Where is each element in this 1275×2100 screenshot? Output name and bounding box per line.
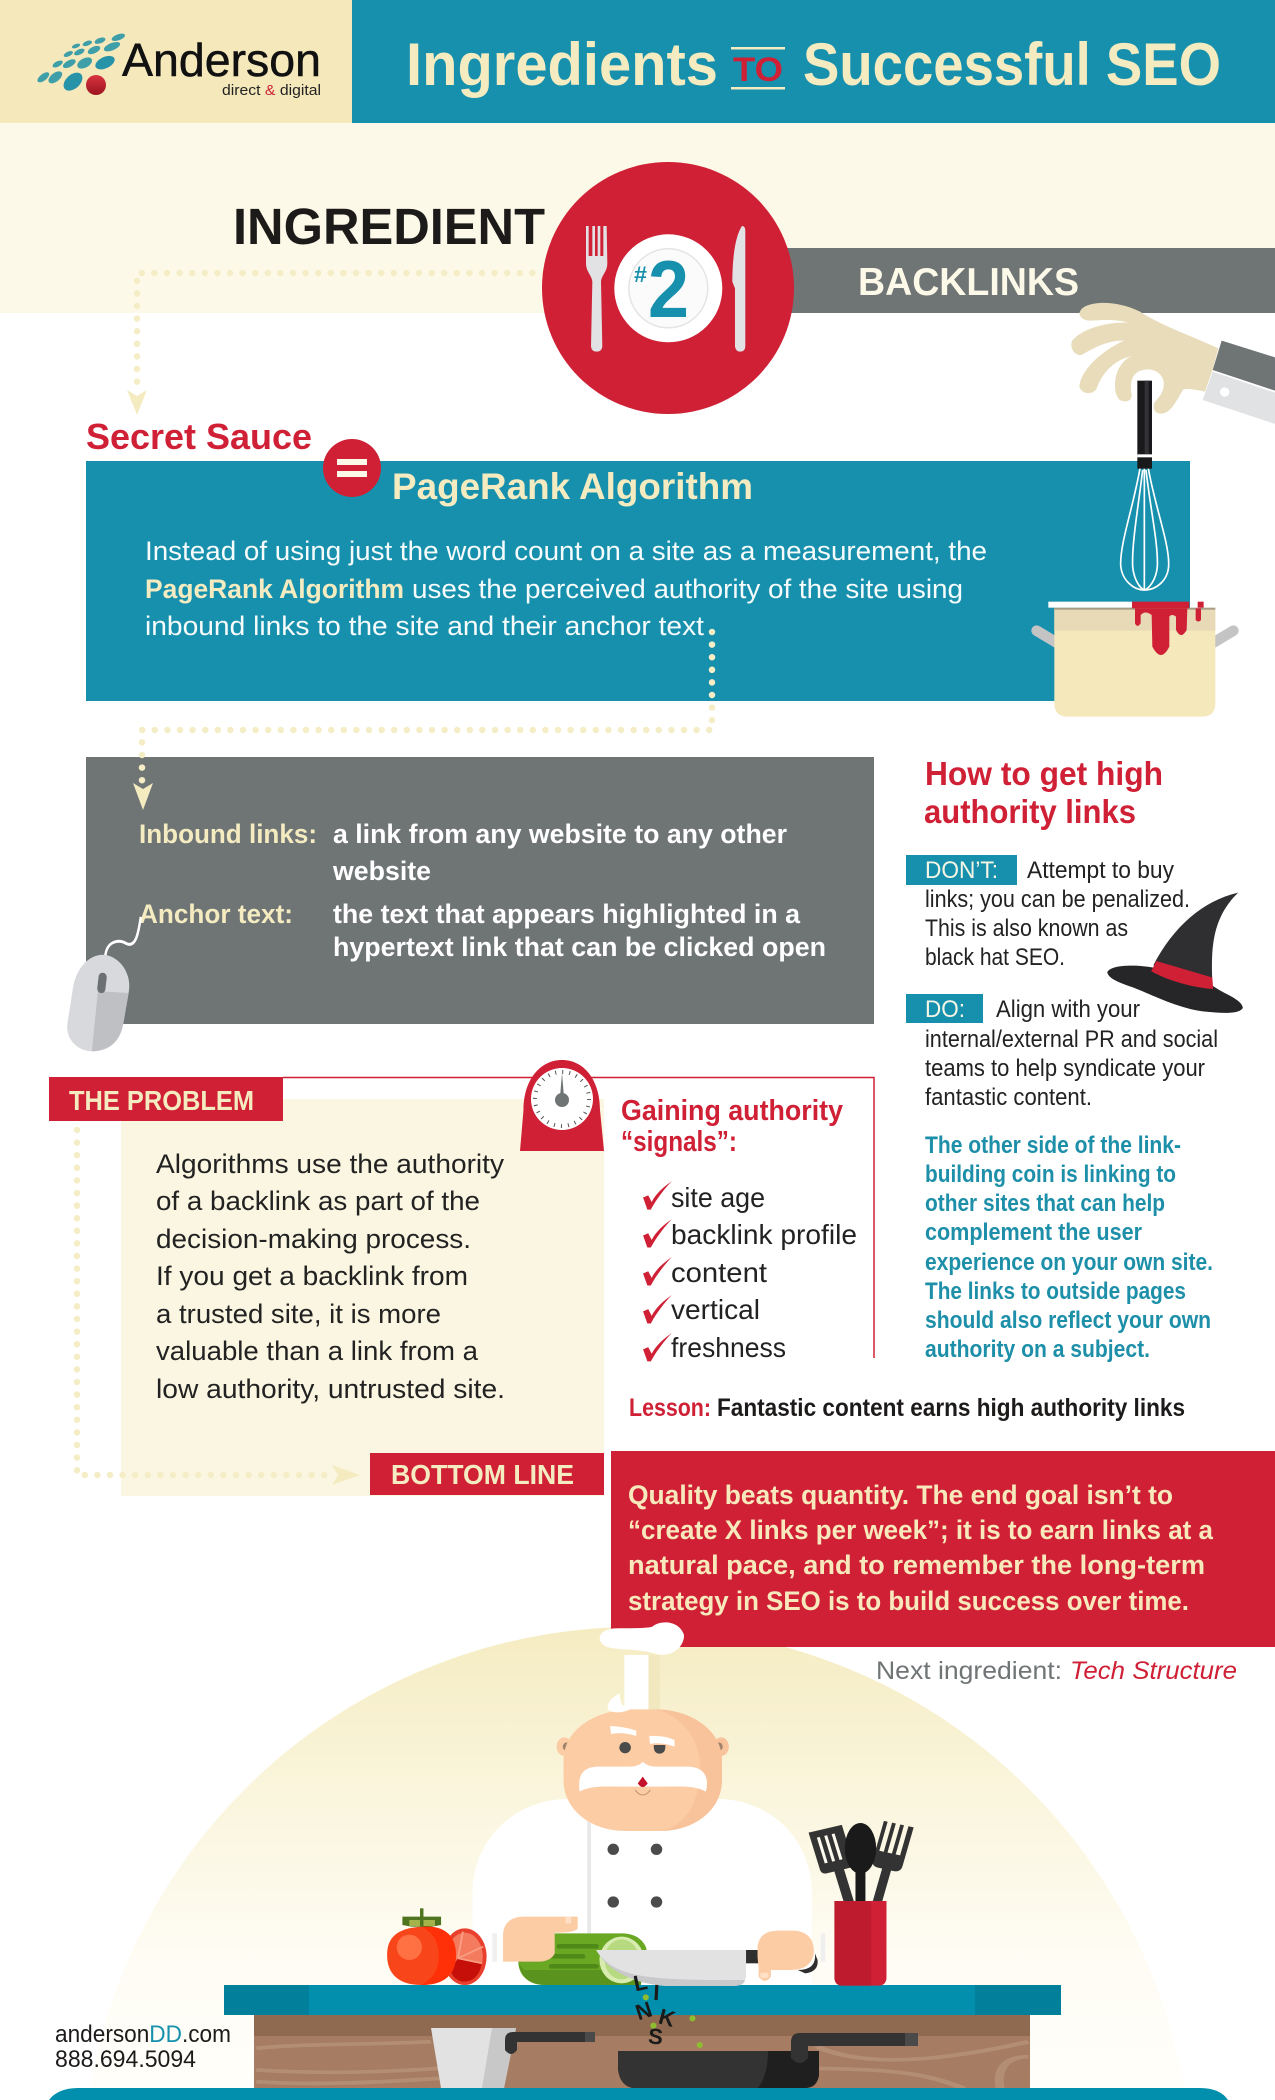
- body text: uses the perceived authority of the site using: [412, 574, 963, 604]
- definition: anchor text: the text that appears highlighted in a: [333, 899, 801, 929]
- problem body text: a trusted site, it is more: [156, 1299, 441, 1329]
- heading: how to get high authority links: How to get high: [925, 755, 1163, 792]
- text: do advice: [925, 996, 1218, 1111]
- problem body text: valuable than a link from a: [156, 1336, 479, 1366]
- text: other side of link building: The links to outside pages: [925, 1278, 1186, 1305]
- badge: don't: DON’T:: [925, 857, 998, 884]
- label: bottom line: BOTTOM LINE: [391, 1459, 574, 1490]
- text: other side of link building: [925, 1132, 1213, 1363]
- heading: secret sauce: Secret Sauce: [86, 416, 312, 457]
- falling letters: links: N: [632, 1997, 655, 2025]
- heading: how to get high authority links: authority links: [924, 793, 1136, 830]
- contact details: andersonDD.com: [55, 2021, 231, 2048]
- logo tagline: direct & digital: [222, 82, 321, 99]
- text: other side of link building: should also reflect your own: [925, 1307, 1211, 1334]
- title: Ingredients: Ingredients: [406, 31, 718, 98]
- text: other side of link building: The other side of the link-: [925, 1132, 1181, 1159]
- arrow: dotted from problem to bottom line: [77, 1130, 360, 1485]
- text: other side of link building: other sites that can help: [925, 1190, 1165, 1217]
- falling letters: links: [631, 1969, 678, 2050]
- text: other side of link building: experience on your own site.: [925, 1249, 1213, 1276]
- next ingredient: Tech Structure: [1070, 1657, 1237, 1685]
- label: the problem: [49, 1077, 283, 1121]
- text: don't advice: Attempt to buy: [1027, 857, 1174, 884]
- lesson line: Fantastic content earns high authority links: [717, 1394, 1185, 1422]
- text: do advice: internal/external PR and social: [925, 1026, 1218, 1053]
- red circle plate icon: [542, 162, 794, 414]
- heading: gaining authority: “signals”:: [621, 1126, 737, 1158]
- lesson line: Lesson:: [629, 1394, 711, 1422]
- check marks: [643, 1181, 672, 1361]
- text: other side of link building: building coin is linking to: [925, 1161, 1176, 1188]
- icon: equals: [323, 439, 381, 497]
- number 2: [634, 245, 689, 335]
- text: do advice: Align with your: [996, 996, 1140, 1023]
- label: bottom line: [370, 1453, 604, 1495]
- signals list: backlink profile: [671, 1219, 857, 1250]
- chef right hand: [758, 1931, 814, 1981]
- falling letters: links: S: [647, 2023, 664, 2050]
- chef hat: [600, 1622, 684, 1713]
- definition: inbound links: website: [332, 856, 431, 886]
- label: the problem: THE PROBLEM: [69, 1085, 254, 1116]
- icon: mouse: [67, 917, 141, 1051]
- chef eyes: [619, 1742, 665, 1754]
- countertop: [224, 1985, 1061, 2015]
- problem body text: Algorithms use the authority: [156, 1149, 505, 1179]
- bottom line text: [628, 1480, 1214, 1616]
- chef eyebrows: [610, 1726, 674, 1747]
- logo dot field: [36, 32, 126, 94]
- next ingredient: Next ingredient:: [876, 1657, 1062, 1685]
- bottom bar: [49, 2088, 1228, 2100]
- problem body text: If you get a backlink from: [156, 1261, 468, 1291]
- heading: page rank algorithm: PageRank Algorithm: [392, 466, 753, 507]
- badge: do: [906, 994, 983, 1023]
- cup: [834, 1901, 886, 1986]
- illustration: kitchen counter: [49, 1985, 1228, 2100]
- problem body text: low authority, untrusted site.: [156, 1374, 505, 1404]
- text: don't advice: black hat SEO.: [925, 944, 1065, 971]
- tomato: [387, 1908, 456, 1985]
- chef head: [557, 1693, 729, 1831]
- number 2: #: [634, 262, 647, 287]
- chef body: [472, 1799, 825, 1985]
- bottom line text: Quality beats quantity. The end goal isn’t to: [628, 1480, 1173, 1510]
- panel: gaining authority signals: [621, 1095, 857, 1363]
- text: other side of link building: complement the user: [925, 1219, 1142, 1246]
- frying pan: [618, 2033, 918, 2088]
- knife: [596, 1950, 818, 1986]
- illustration: hand holding whisk over pot: [1037, 303, 1275, 717]
- icon: knife: [732, 226, 745, 352]
- body text: inbound links to the site and their anchor text: [145, 611, 705, 641]
- illustration: background dome: [90, 1627, 1184, 2088]
- arrow: dotted from ingredient to secret sauce: [127, 273, 545, 415]
- definition: anchor text: [333, 899, 826, 962]
- falling letters: links: L: [631, 1969, 650, 1996]
- fork: [861, 1821, 914, 1908]
- problem body text: [156, 1149, 505, 1404]
- logo red ball: [86, 75, 106, 95]
- definition: inbound links: a link from any website to any other: [333, 819, 787, 849]
- signals list: [671, 1182, 857, 1363]
- panel: bottom line message: [611, 1451, 1275, 1647]
- tomato slice: [443, 1928, 487, 1985]
- header: logo panel: [0, 0, 352, 123]
- illustration: chef: [387, 1622, 914, 2048]
- contact details: 888.694.5094: [55, 2046, 196, 2073]
- pot: [1048, 602, 1215, 717]
- hand: [1071, 303, 1218, 414]
- bottom line text: natural pace, and to remember the long-term: [628, 1550, 1205, 1580]
- text: other side of link building: authority on a subject.: [925, 1336, 1150, 1363]
- text: do advice: fantastic content.: [925, 1084, 1092, 1111]
- backlinks band: [780, 248, 1275, 313]
- bottom line text: strategy in SEO is to build success over time.: [628, 1586, 1189, 1616]
- ingredient band: [0, 123, 1275, 313]
- problem outline rule: [283, 1078, 874, 1358]
- text: don't advice: [925, 857, 1190, 971]
- icon: witch hat: [1107, 893, 1243, 1013]
- icon: kitchen scale: [520, 1060, 604, 1151]
- spoon: [845, 1823, 876, 1903]
- sauce drips: [1132, 602, 1204, 655]
- cuff: [1203, 341, 1275, 424]
- whisk handle: [1137, 381, 1152, 469]
- saucepan: [431, 2028, 595, 2088]
- heading: how to get high authority links: [924, 755, 1163, 830]
- icon: plate: [614, 234, 722, 342]
- signals list: vertical: [671, 1294, 760, 1325]
- falling letters: links: K: [656, 2004, 678, 2032]
- logo wordmark: Anderson: [122, 34, 321, 86]
- body text: Instead of using just the word count on a site as a measurement, the: [145, 536, 987, 566]
- definition: anchor text: hypertext link that can be clicked open: [333, 932, 826, 962]
- backlinks label: BACKLINKS: [858, 261, 1079, 304]
- heading: ingredient: INGREDIENT: [233, 198, 545, 255]
- chef nose and mouth: [635, 1777, 650, 1795]
- heading: gaining authority: Gaining authority: [621, 1095, 843, 1127]
- title: Successful SEO: Successful SEO: [803, 31, 1221, 98]
- badge: don't: [906, 855, 1017, 885]
- body text: PageRank Algorithm: [145, 574, 404, 604]
- signals list: site age: [671, 1182, 765, 1213]
- icon: fork: [586, 226, 607, 352]
- arrow: dotted from anchor text to inbound links: [133, 632, 712, 810]
- title: TO: TO: [733, 51, 783, 89]
- problem body text: decision-making process.: [156, 1224, 471, 1254]
- badge: do: DO:: [925, 996, 965, 1023]
- signals list: freshness: [671, 1332, 786, 1363]
- number 2: 2: [648, 245, 689, 335]
- utensils in cup: [809, 1821, 914, 1986]
- definition: inbound links: [332, 819, 787, 886]
- next ingredient: [876, 1657, 1237, 1685]
- heading: gaining authority: [621, 1095, 843, 1158]
- problem body text: of a backlink as part of the: [156, 1186, 480, 1216]
- falling green bits: [643, 1994, 703, 2048]
- whisk wires: [1121, 468, 1169, 590]
- label: anchor text: Anchor text:: [139, 899, 293, 929]
- body text: [145, 536, 987, 641]
- text: do advice: teams to help syndicate your: [925, 1055, 1205, 1082]
- panel: the problem: [121, 1099, 604, 1496]
- chef hair curl: [608, 1693, 631, 1712]
- cucumber: [518, 1933, 647, 1985]
- falling letters: links: I: [653, 1980, 660, 2005]
- cabinet: [254, 2015, 1030, 2088]
- pot handles: [1037, 631, 1233, 643]
- text: don't advice: links; you can be penalized.: [925, 886, 1190, 913]
- header: title panel: [352, 0, 1275, 123]
- label: inbound links: Inbound links:: [139, 819, 317, 849]
- contact details: [55, 2021, 231, 2073]
- panel: page rank algorithm: [86, 461, 1190, 701]
- signals list: content: [671, 1257, 767, 1288]
- text: don't advice: This is also known as: [925, 915, 1128, 942]
- chef moustache: [579, 1762, 707, 1792]
- bottom line text: “create X links per week”; it is to earn links at a: [628, 1515, 1214, 1545]
- spatula: [809, 1825, 867, 1913]
- chef left hand: [503, 1917, 578, 1962]
- panel: definitions: [86, 757, 874, 1024]
- panel: how to get high authority links: [906, 755, 1243, 1363]
